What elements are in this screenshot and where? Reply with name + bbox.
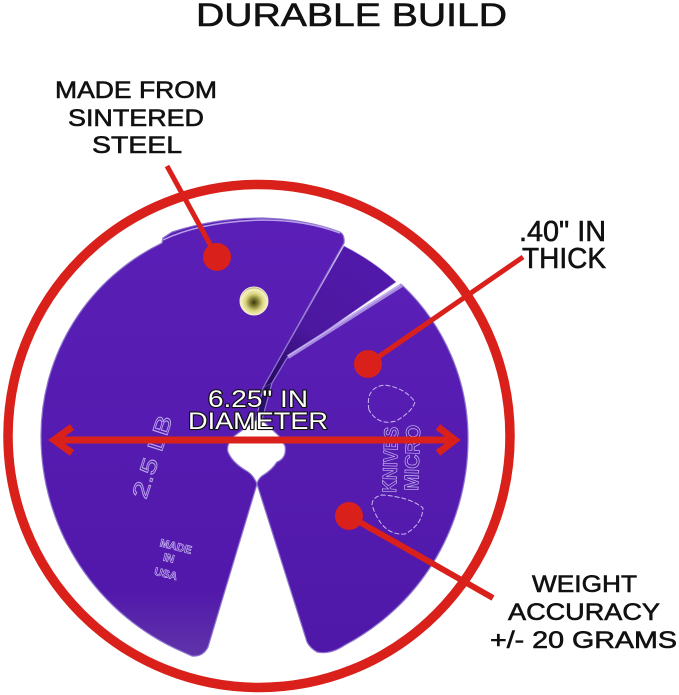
red ring: [8, 184, 510, 688]
label: weight accuracy: [490, 572, 677, 654]
diameter label: DIAMETER: [188, 408, 328, 435]
engraved origin: [152, 537, 193, 585]
dark gap between plates: [256, 383, 272, 420]
purple weight disc: [41, 218, 468, 656]
engraved logo: MICRO: [401, 424, 425, 491]
plate top highlight: [163, 220, 340, 240]
label: made from sintered steel: SINTERED: [68, 106, 204, 132]
engraved weight: 2.5 LB: [127, 412, 177, 502]
engraved logo: [368, 385, 425, 534]
label: weight accuracy: WEIGHT: [532, 572, 637, 598]
rivet: [240, 287, 268, 315]
label: weight accuracy: +/- 20 GRAMS: [490, 628, 677, 654]
label: made from sintered steel: [55, 78, 217, 159]
label: thickness: THICK: [522, 243, 607, 275]
diameter label: [188, 386, 328, 435]
callout: sintered steel pointer: [167, 166, 231, 271]
left plate: [41, 218, 344, 656]
diameter arrow: [54, 427, 455, 453]
diameter label: 6.25" IN: [208, 386, 308, 413]
plate edge highlight: [288, 285, 402, 357]
engraved logo: KNIVES: [379, 426, 403, 493]
label: thickness: .40" IN: [519, 216, 606, 248]
label: weight accuracy: ACCURACY: [508, 600, 660, 626]
right plate: [257, 285, 468, 653]
label: thickness: [519, 216, 607, 275]
engraved origin: MADE: [159, 537, 193, 557]
label: made from sintered steel: MADE FROM: [55, 78, 217, 104]
back plate wedge: [263, 246, 396, 388]
callout: thickness pointer: [354, 257, 523, 378]
engraved origin: USA: [153, 566, 179, 583]
callout: weight pointer: [335, 502, 493, 598]
label: made from sintered steel: STEEL: [92, 133, 182, 159]
engraved origin: IN: [162, 552, 176, 566]
